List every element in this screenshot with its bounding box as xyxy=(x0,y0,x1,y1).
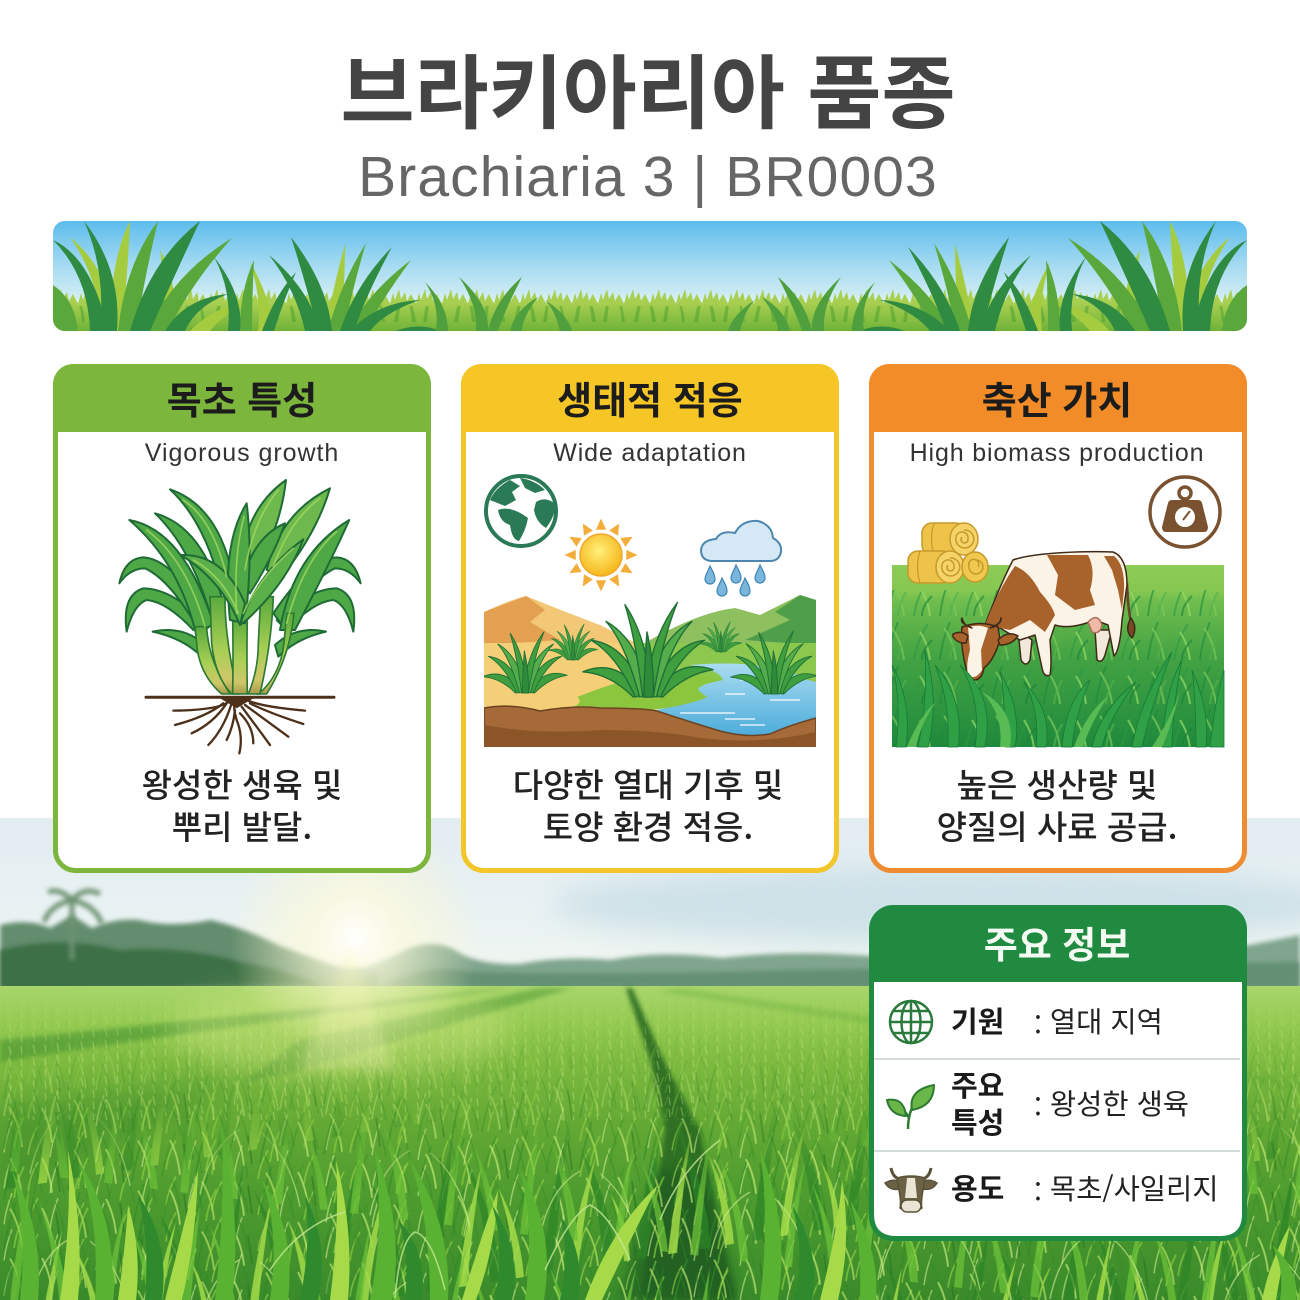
panel: key information xyxy=(869,905,1247,1241)
title: 브라키아리아 품종 xyxy=(340,30,956,146)
icon: rain cloud xyxy=(701,521,781,596)
icon: sprout xyxy=(887,1085,934,1129)
row: use xyxy=(885,1166,1218,1212)
hay bales xyxy=(908,523,988,583)
description: 다양한 열대 기후 및 xyxy=(513,759,783,807)
card frame xyxy=(869,364,1247,870)
subtitle: Brachiaria 3 | BR0003 xyxy=(358,145,938,209)
crop rows xyxy=(0,988,1300,1300)
tree line xyxy=(0,891,1300,990)
icon: globe xyxy=(486,476,556,546)
pond xyxy=(656,664,816,735)
icon: sun xyxy=(564,518,638,592)
heading: 축산 가치 xyxy=(982,370,1132,425)
panel: livestock value xyxy=(869,364,1247,870)
foreground blades xyxy=(12,1130,1296,1300)
cow xyxy=(953,552,1135,680)
description: 뿌리 발달. xyxy=(172,801,312,849)
leaf midribs xyxy=(147,490,337,627)
row: origin: 열대 지역 xyxy=(1042,1000,1163,1041)
row: main trait: 왕성한 생육 xyxy=(1042,1082,1189,1123)
row: origin: : xyxy=(1034,1004,1042,1045)
row: origin: 기원 xyxy=(951,999,1004,1041)
grass clumps xyxy=(483,632,567,693)
landscape illustration xyxy=(483,595,817,747)
dunes and hills xyxy=(484,595,816,643)
icon: cow head xyxy=(885,1168,937,1212)
row: use: 목초/사일리지 xyxy=(1042,1167,1218,1208)
panel: ecological adaptation xyxy=(461,364,839,870)
card frame xyxy=(461,364,839,870)
row: main trait: 특성 xyxy=(951,1100,1004,1142)
soil xyxy=(484,705,816,740)
heading: 목초 특성 xyxy=(167,370,317,425)
english caption: Vigorous growth xyxy=(145,439,339,467)
english caption: Wide adaptation xyxy=(553,439,747,467)
icon: globe xyxy=(890,1001,932,1043)
row: main trait: 주요 xyxy=(951,1063,1004,1105)
panel frame xyxy=(869,905,1247,1241)
description: 높은 생산량 및 xyxy=(957,759,1157,807)
grass banner xyxy=(53,221,1247,331)
icon: grass plant with roots xyxy=(119,480,361,753)
sun glow xyxy=(230,813,480,1063)
row: use: 용도 xyxy=(951,1166,1004,1208)
description: 왕성한 생육 및 xyxy=(142,759,342,807)
description: 양질의 사료 공급. xyxy=(937,801,1177,849)
icon: weight scale xyxy=(1150,477,1220,547)
back leaves xyxy=(119,480,361,657)
card frame xyxy=(53,364,431,870)
foreground grass xyxy=(892,650,1224,747)
stems xyxy=(195,597,294,694)
roots xyxy=(146,697,334,753)
front leaves xyxy=(181,503,303,625)
row: main trait xyxy=(887,1063,1189,1142)
english caption: High biomass production xyxy=(910,439,1204,467)
pasture scene xyxy=(892,523,1224,747)
row: main trait: : xyxy=(1034,1086,1042,1127)
field xyxy=(0,986,1300,1300)
panel: forage traits xyxy=(53,364,431,870)
row: use: : xyxy=(1034,1171,1042,1212)
row: origin xyxy=(890,999,1163,1045)
photo background: sky and grass field xyxy=(0,818,1300,1300)
heading: 주요 정보 xyxy=(984,915,1130,969)
green bank xyxy=(570,675,723,710)
description: 토양 환경 적응. xyxy=(543,801,753,849)
heading: 생태적 적응 xyxy=(557,370,743,425)
